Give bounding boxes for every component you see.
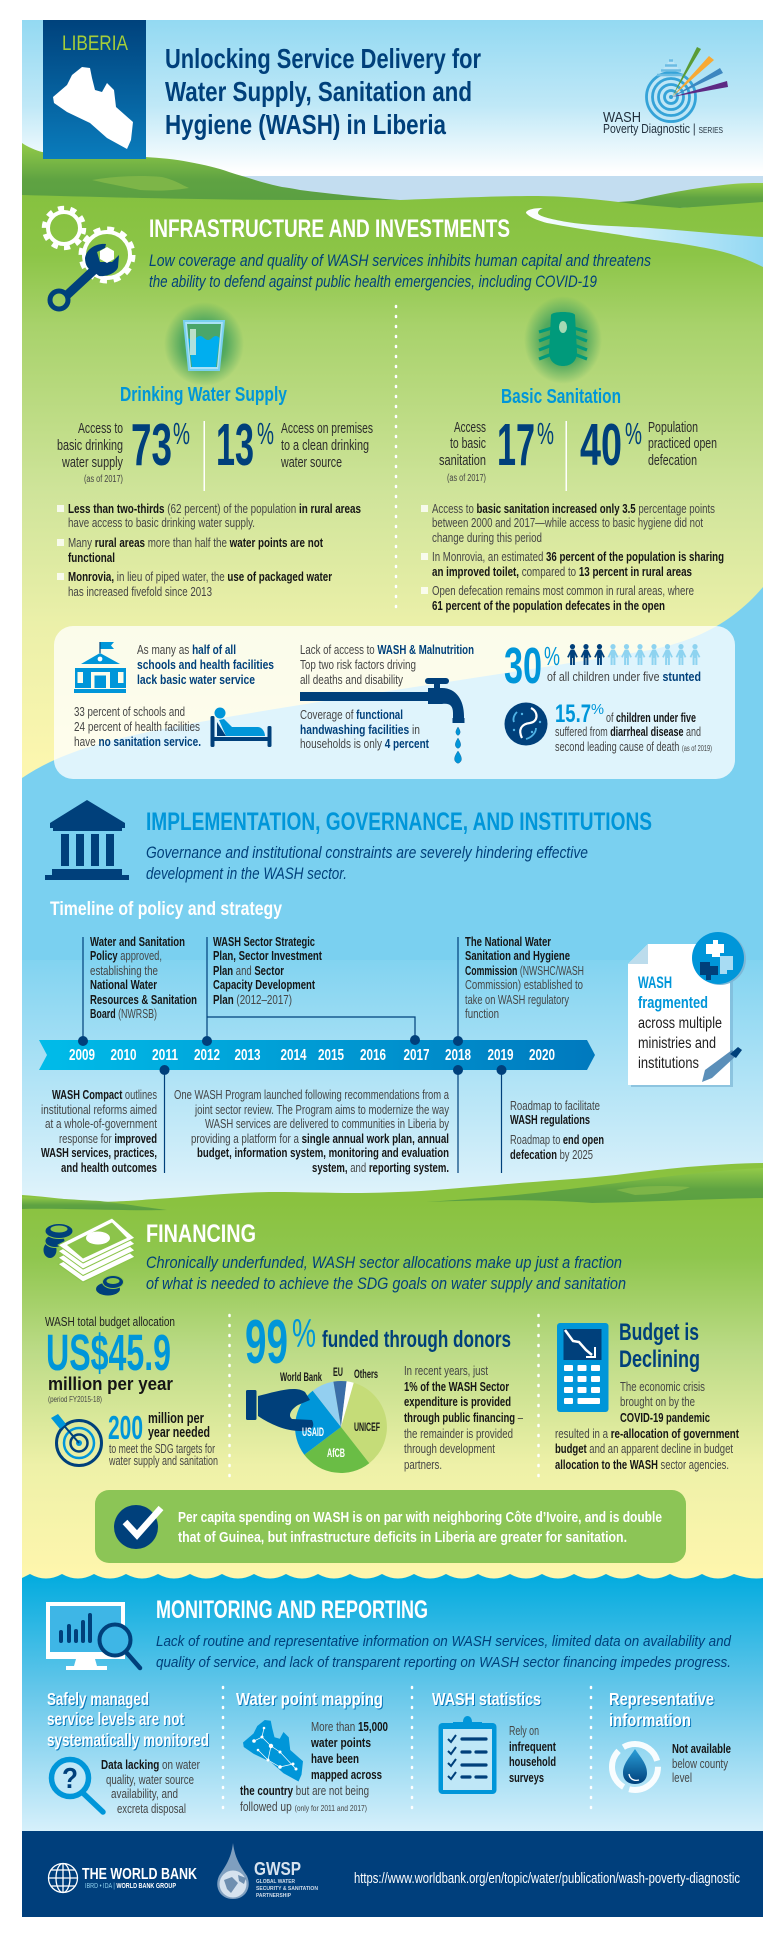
event: 2018: Commission (NWSHC/WASH (465, 963, 584, 978)
title: Hygiene (WASH) in Liberia (165, 109, 446, 140)
years: 2017 (404, 1047, 430, 1064)
stat: 17 percent (439, 412, 554, 484)
icon: puzzle circle (692, 932, 746, 985)
bullet list: Many rural areas more than half the water points are not (68, 535, 323, 550)
heading: budget is declining (619, 1319, 700, 1373)
years: 2020 (529, 1047, 555, 1064)
heading: Basic Sanitation (501, 385, 621, 408)
intro text: quality of service, and lack of transparent reporting on WASH sector financing impedes progress. (156, 1654, 731, 1671)
icon: children row (567, 644, 700, 665)
stat: diarrheal disease: % (591, 701, 604, 718)
heading: FINANCING (146, 1220, 256, 1248)
column: water point mapping (236, 1689, 388, 1814)
bullet list: Open defecation remains most common in rural areas, where (432, 583, 694, 598)
text: economic crisis: resulted in a re-allocation of government (555, 1426, 739, 1441)
country tag: LIBERIA (62, 31, 129, 55)
event: 2009 (90, 934, 197, 1021)
stat: 13 percent: Access on premises (281, 421, 373, 437)
text: malnutrition: Top two risk factors driving (300, 657, 416, 672)
icon: hand (246, 1389, 313, 1431)
stat: 17 percent: to basic (450, 436, 486, 452)
column: safely managed: quality, water source (106, 1772, 194, 1787)
column: WASH statistics (432, 1689, 556, 1794)
logo: WASH poverty diagnostic series: WASH (603, 109, 641, 126)
bullet list: have access to basic drinking water supply. (68, 515, 255, 530)
icon: target (51, 1414, 102, 1466)
icon: recycle water drop (612, 1744, 658, 1790)
bullet list: functional (68, 550, 115, 565)
icon: gears and wrench (44, 208, 134, 309)
icon: clipboard checklist (438, 1716, 496, 1794)
stat: 73 percent: % (173, 416, 190, 451)
column: representative information: information (609, 1710, 691, 1730)
years: 2014 (280, 1047, 307, 1064)
event: 2018: The National Water (465, 934, 551, 949)
years: 2010 (110, 1047, 136, 1064)
intro text (156, 1633, 732, 1671)
event: 2018: Commission) established to (465, 977, 583, 992)
stat: 13 percent: to a clean drinking (281, 438, 369, 454)
callout: per capita spending (95, 1490, 686, 1563)
logo: GWSP: GLOBAL WATER (256, 1879, 295, 1885)
years: 2011 (152, 1047, 178, 1064)
event: 2011: and health outcomes (61, 1160, 157, 1175)
timeline arrow (39, 1040, 595, 1070)
text: schools water service: lack basic water service (137, 672, 255, 687)
logo: GWSP: PARTNERSHIP (256, 1893, 292, 1899)
icon: bed (210, 708, 272, 747)
panel: financing (44, 1218, 739, 1563)
event: 2019 roadmaps: Roadmap to facilitate (510, 1098, 600, 1113)
stat: total budget allocation: US$45.9 (46, 1324, 171, 1381)
stat: total budget allocation: million per year (48, 1373, 173, 1394)
column: safely managed: Safely managed (47, 1689, 149, 1709)
intro text: the ability to defend against public health emergencies, including COVID-19 (149, 273, 597, 291)
column: representative information (609, 1689, 731, 1790)
stat: 30 percent stunted: 30 (504, 637, 542, 694)
stat: diarrheal disease: of children under five (606, 710, 696, 725)
years: 2016 (360, 1047, 386, 1064)
stat: 17 percent: (as of 2017) (447, 473, 486, 484)
footer (22, 1831, 763, 1917)
event: One WASH Program: WASH services are delivered to communities in Liberia by (205, 1116, 449, 1131)
callout: WASH fragmented (628, 932, 746, 1087)
column: water point mapping: have been (311, 1751, 359, 1766)
callout: WASH fragmented: institutions (638, 1055, 699, 1072)
text: schools water service (137, 642, 274, 687)
chart: donor pie: Others (354, 1369, 378, 1381)
event: 2011 (41, 1087, 157, 1175)
event: 2009: Resources & Sanitation (90, 992, 197, 1007)
text: handwashing: Coverage of functional (300, 707, 403, 722)
icon: tap with drops (300, 678, 464, 763)
text: schools sanitation service (74, 704, 201, 749)
intro text: Chronically underfunded, WASH sector allocations make up just a fraction (146, 1254, 622, 1272)
text: public financing: partners. (404, 1457, 442, 1472)
icon: calculator with falling arrow (557, 1323, 608, 1412)
bullet list: change during this period (432, 530, 542, 545)
column: representative information: Representative (609, 1689, 714, 1709)
panel: implementation, governance, and institutions (39, 800, 746, 1175)
text: public financing: 1% of the WASH Sector (404, 1379, 509, 1394)
text: economic crisis: allocation to the WASH sector agencies. (555, 1457, 729, 1472)
logo: WASH poverty diagnostic series (603, 47, 728, 136)
intro text: Low coverage and quality of WASH services inhibits human capital and threatens (149, 252, 651, 270)
subpanel: drinking water supply (57, 302, 373, 599)
intro text (146, 844, 588, 883)
chart: donor pie: UNICEF (354, 1422, 380, 1434)
stat: diarrheal disease: suffered from diarrheal disease and (555, 724, 701, 739)
intro text: of what is needed to achieve the SDG goals on water supply and sanitation (146, 1275, 626, 1293)
chart: donor pie: USAID (302, 1427, 324, 1439)
stat: 13 percent: water source (280, 455, 342, 471)
stat: 17 percent: sanitation (439, 453, 486, 469)
event: 2018: function (465, 1006, 499, 1021)
stat: 17 percent: % (537, 416, 554, 451)
column: water point mapping: More than 15,000 (311, 1719, 388, 1734)
panel: key facts (54, 626, 735, 779)
event: 2009: Policy approved, (90, 948, 162, 963)
event: 2018: take on WASH regulatory (465, 992, 569, 1007)
event: 2011: WASH services, practices, (41, 1145, 157, 1160)
stat: 73 percent: water supply (61, 455, 124, 471)
logo: The World Bank (48, 1863, 198, 1893)
stat: 30 percent stunted: of all children under five stunted (547, 669, 701, 684)
stat: 40 percent: 40 (580, 412, 622, 478)
bullet list: In Monrovia, an estimated 36 percent of the population is sharing (432, 549, 724, 564)
column: WASH statistics: infrequent (509, 1739, 556, 1754)
column: safely managed: Data lacking on water (101, 1757, 201, 1772)
years: 2012 (194, 1047, 220, 1064)
event: 2011: at a whole-of-government (45, 1116, 157, 1131)
years: 2009 (69, 1047, 95, 1064)
country tag (43, 20, 146, 159)
logo: GWSP (217, 1843, 318, 1899)
event: One WASH Program: system, and reporting system. (312, 1160, 449, 1175)
callout: WASH fragmented: ministries and (638, 1035, 716, 1052)
stat: 200 million needed: year needed (148, 1425, 210, 1441)
event: 2011: institutional reforms aimed (41, 1102, 157, 1117)
text: schools water service: schools and health facilities (137, 657, 274, 672)
text: economic crisis: COVID-19 pandemic (620, 1410, 710, 1425)
title: Unlocking Service Delivery for (165, 43, 481, 74)
text: schools sanitation service: 33 percent of schools and (74, 704, 185, 719)
icon: question magnifier: ? (62, 1763, 78, 1795)
icon: latrine (524, 296, 602, 384)
heading: INFRASTRUCTURE AND INVESTMENTS (149, 215, 510, 243)
icon: map of water points (243, 1720, 303, 1782)
stat: 73 percent: Access to (78, 421, 123, 437)
column: safely managed: availability, and (111, 1786, 178, 1801)
bullet list: 61 percent of the population defecates in the open (432, 598, 665, 613)
event: One WASH Program: budget, information system, monitoring and evaluation (197, 1145, 449, 1160)
text: handwashing: households is only 4 percent (300, 736, 430, 751)
bullet list (57, 501, 361, 599)
event: 2019 roadmaps (510, 1098, 604, 1162)
icon: pen (702, 1047, 742, 1082)
text: public financing (404, 1363, 524, 1472)
icon: germ circle (504, 702, 548, 746)
column: representative information: level (672, 1770, 692, 1785)
stat: 73 percent: 73 (131, 412, 172, 478)
stat: 200 million needed: water supply and sanitation (108, 1453, 218, 1468)
stat: 13 percent: % (257, 416, 274, 451)
event: 2009: Water and Sanitation (90, 934, 185, 949)
stat: 73 percent: (as of 2017) (84, 474, 123, 485)
column: safely managed: excreta disposal (117, 1801, 186, 1816)
stat: 40 percent: defecation (648, 453, 697, 469)
years: 2013 (234, 1047, 261, 1064)
icon: monitor and magnifier (46, 1602, 140, 1670)
stat: diarrheal disease (555, 700, 712, 754)
heading: MONITORING AND REPORTING (156, 1596, 428, 1624)
icon: institution building (45, 800, 129, 880)
event: 2011: response for improved (59, 1131, 157, 1146)
icon: money stack and coins (44, 1218, 135, 1296)
stat: total budget allocation: (period FY2015-18) (48, 1395, 102, 1404)
bullet list: an improved toilet, compared to 13 percent in rural areas (432, 564, 692, 579)
stat: total budget allocation (45, 1314, 175, 1404)
event: One WASH Program: providing a platform for a single annual work plan, annual (191, 1131, 449, 1146)
column: safely managed: service levels are not (47, 1709, 184, 1729)
title (165, 43, 481, 140)
stat: 73 percent (57, 412, 190, 485)
panel: title banner (43, 20, 728, 159)
years: 2019 (488, 1047, 514, 1064)
event: 2009: establishing the (90, 963, 158, 978)
years: 2018 (445, 1047, 471, 1064)
stat: 200 million needed: to meet the SDG targets for (109, 1441, 215, 1456)
event: 2011: WASH Compact outlines (52, 1087, 157, 1102)
event: 2012 (213, 934, 322, 1007)
event: One WASH Program: joint sector review. The Program aims to modernize the way (194, 1102, 449, 1117)
stat: total budget allocation: WASH total budget allocation (45, 1314, 175, 1329)
logo: GWSP: SECURITY & SANITATION (256, 1886, 318, 1892)
stat: 40 percent: % (625, 416, 642, 451)
column: water point mapping: the country but are not being (240, 1783, 369, 1798)
event: 2012: Plan, Sector Investment (213, 948, 322, 963)
intro text (149, 252, 651, 291)
intro text (146, 1254, 626, 1293)
panel: monitoring and reporting (46, 1596, 732, 1816)
text: economic crisis: The economic crisis (620, 1379, 705, 1394)
bullet list (421, 501, 724, 613)
intro text: Governance and institutional constraints are severely hindering effective (146, 844, 588, 862)
stat: 99 percent funded through donors: 99 (245, 1308, 288, 1377)
event: 2012: Capacity Development (213, 977, 315, 992)
text: schools water service: As many as half of all (137, 642, 236, 657)
background landscape (22, 20, 763, 1582)
stat: 73 percent: basic drinking (57, 438, 123, 454)
text: public financing: expenditure is provided (404, 1394, 511, 1409)
stat: 99 percent funded through donors: % (292, 1312, 316, 1356)
text: public financing: the remainder is provided (404, 1426, 513, 1441)
wave and monitoring background (22, 1574, 763, 1831)
chart: donor pie (246, 1367, 387, 1473)
bullet list: has increased fivefold since 2013 (68, 584, 212, 599)
event: 2009: National Water (90, 977, 157, 992)
column: representative information: Not available (672, 1741, 731, 1756)
column: safely managed: systematically monitored (47, 1730, 209, 1750)
callout: WASH fragmented: across multiple (638, 1015, 722, 1032)
text: public financing: through development (404, 1441, 495, 1456)
event: 2019 roadmaps: Roadmap to end open (510, 1132, 604, 1147)
stat: 200 million needed (108, 1409, 218, 1468)
logo: GWSP: GWSP (254, 1859, 301, 1879)
text: public financing: In recent years, just (404, 1363, 488, 1378)
logo: The World Bank: IBRD • IDA | WORLD BANK GROUP (85, 1881, 176, 1890)
stat: 40 percent: Population (648, 420, 698, 436)
event: 2012: Plan and Sector (213, 963, 284, 978)
text: economic crisis: budget and an apparent decline in budget (555, 1441, 733, 1456)
bullet list: Less than two-thirds (62 percent) of the population in rural areas (68, 501, 361, 516)
callout: WASH fragmented: WASH (638, 973, 672, 992)
column: water point mapping: followed up (only for 2011 and 2017) (240, 1799, 367, 1814)
callout: per capita spending: Per capita spending on WASH is on par with neighboring Côte d’Ivoire, and is double (178, 1510, 662, 1526)
column: safely managed (47, 1689, 209, 1816)
text: schools sanitation service: have no sanitation service. (74, 734, 201, 749)
panel: infrastructure and investments (44, 208, 735, 779)
callout: WASH fragmented: fragmented (638, 993, 708, 1012)
event: One WASH Program (174, 1087, 450, 1175)
chart: donor pie: World Bank (280, 1372, 322, 1384)
stat: 17 percent: 17 (497, 412, 535, 478)
text: economic crisis (555, 1379, 739, 1472)
stat: 99 percent funded through donors (245, 1308, 511, 1377)
stat: 13 percent: 13 (216, 412, 254, 478)
logo: WASH poverty diagnostic series: Poverty Diagnostic | SERIES (603, 122, 723, 136)
event: 2009: Board (NWRSB) (90, 1006, 157, 1021)
icon: glass of water (164, 302, 244, 386)
stat: 17 percent: Access (454, 420, 486, 436)
event: 2019 roadmaps: defecation by 2025 (510, 1147, 593, 1162)
heading: budget is declining: Budget is (619, 1319, 699, 1346)
timeline heading: Timeline of policy and strategy (50, 899, 282, 920)
icon: check mark (114, 1505, 161, 1549)
event: 2018 (465, 934, 584, 1021)
text: malnutrition: Lack of access to WASH & Malnutrition (300, 642, 474, 657)
column: water point mapping: Water point mapping (236, 1689, 383, 1709)
text: malnutrition (300, 642, 474, 687)
text: schools sanitation service: 24 percent of health facilities (74, 719, 200, 734)
icon: question magnifier (52, 1760, 103, 1812)
chart: timeline (39, 934, 604, 1175)
column: WASH statistics: surveys (509, 1770, 544, 1785)
stat: 30 percent stunted: % (544, 641, 560, 671)
bullet list: Access to basic sanitation increased only 3.5 percentage points (432, 501, 715, 516)
logo: The World Bank: THE WORLD BANK (82, 1866, 198, 1883)
column: water point mapping: water points (310, 1735, 371, 1750)
event: 2012: WASH Sector Strategic (213, 934, 315, 949)
stat: diarrheal disease: second leading cause of death (as of 2019) (555, 739, 712, 754)
column: WASH statistics: WASH statistics (432, 1689, 541, 1709)
stat: diarrheal disease: 15.7 (555, 700, 591, 728)
chart: donor pie: AfCB (327, 1448, 345, 1460)
stat: 30 percent stunted (504, 637, 701, 694)
column: WASH statistics: Rely on (509, 1723, 539, 1738)
event: One WASH Program: One WASH Program launched following recommendations from a (174, 1087, 450, 1102)
text: handwashing: handwashing facilities in (300, 722, 420, 737)
bullet list: Monrovia, in lieu of piped water, the use of packaged water (68, 569, 332, 584)
stat: 40 percent: practiced open (648, 436, 717, 452)
chart: donor pie: EU (333, 1367, 343, 1379)
intro text: development in the WASH sector. (146, 865, 347, 883)
heading: Drinking Water Supply (120, 383, 287, 406)
event: 2019 roadmaps: WASH regulations (510, 1112, 590, 1127)
heading: budget is declining: Declining (619, 1346, 700, 1373)
text: handwashing (300, 707, 430, 751)
event: 2012: Plan (2012–2017) (213, 992, 292, 1007)
column: WASH statistics: household (509, 1754, 556, 1769)
callout: per capita spending: that of Guinea, but infrastructure deficits in Liberia are greater for sanitation. (178, 1530, 627, 1546)
title: Water Supply, Sanitation and (165, 76, 472, 107)
text: economic crisis: brought on by the (620, 1394, 695, 1409)
stat: 13 percent (216, 412, 373, 478)
stat: 200 million needed: 200 (108, 1409, 143, 1446)
column: water point mapping: mapped across (311, 1767, 382, 1782)
subpanel: basic sanitation (421, 296, 724, 613)
stat: 200 million needed: million per (148, 1411, 204, 1427)
text: public financing: through public financing – (404, 1410, 524, 1425)
years (69, 1047, 555, 1064)
text: malnutrition: all deaths and disability (300, 672, 403, 687)
intro text: Lack of routine and representative information on WASH services, limited data on availability and (156, 1633, 732, 1650)
stat: 99 percent funded through donors: funded through donors (322, 1326, 511, 1352)
stat: 40 percent (580, 412, 717, 478)
icon: school (74, 642, 126, 693)
years: 2015 (318, 1047, 344, 1064)
column: representative information: below county (672, 1756, 728, 1771)
event: 2018: Sanitation and Hygiene (465, 948, 570, 963)
